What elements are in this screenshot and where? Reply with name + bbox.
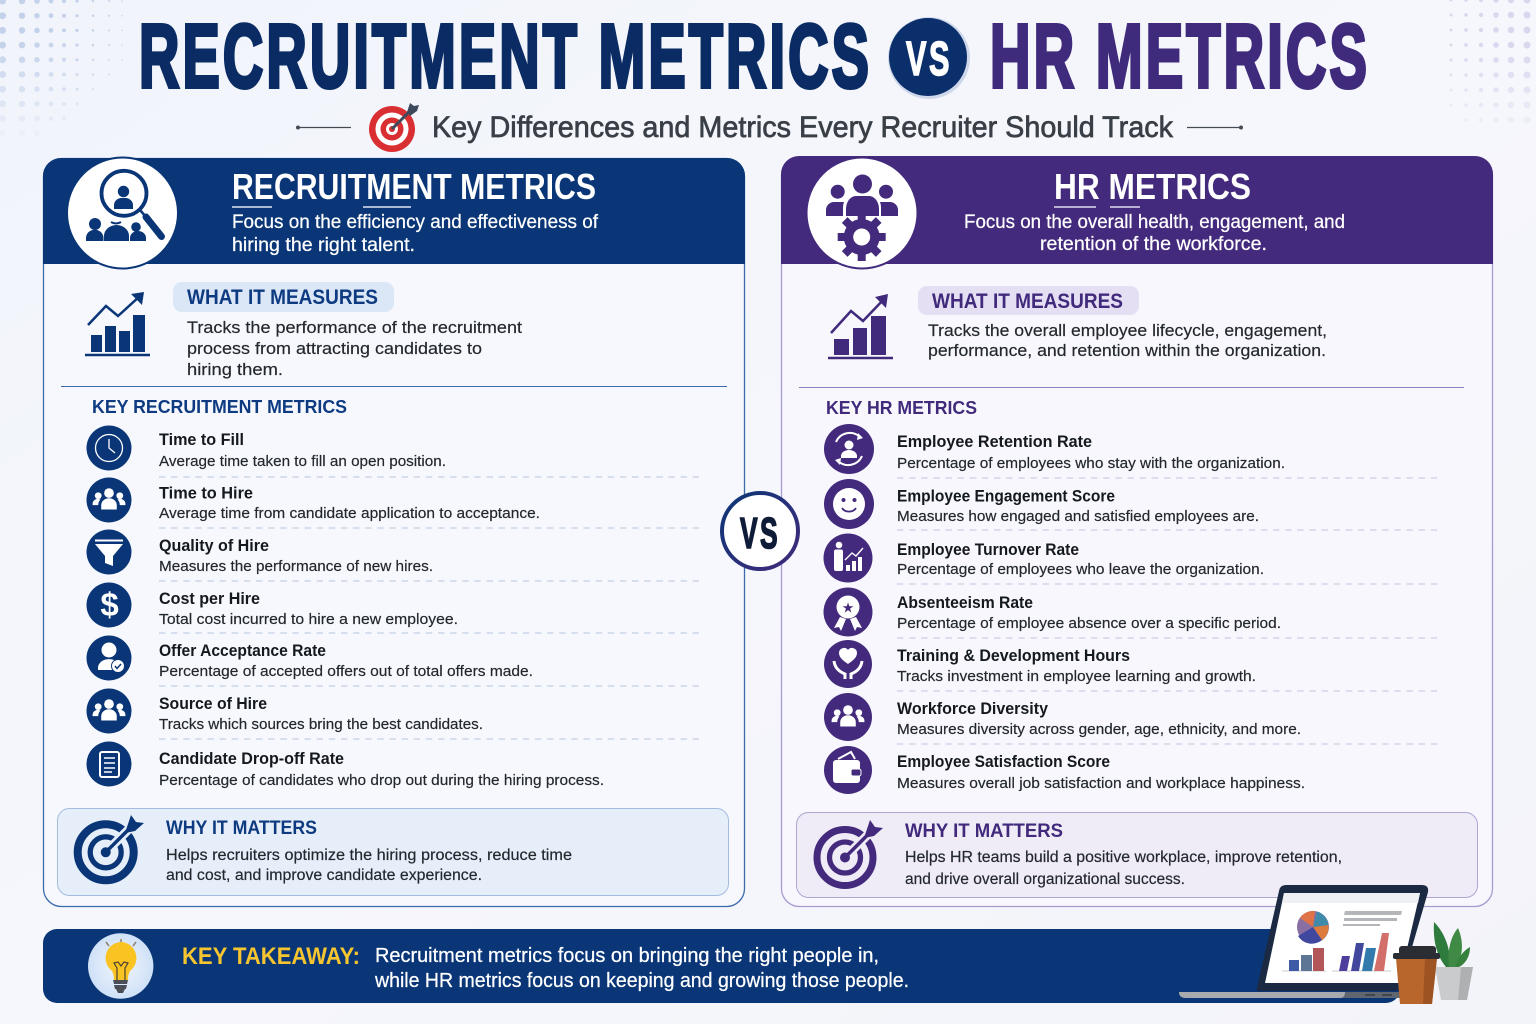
metric: workforce diversity: Measures diversity across gender, age, ethnicity, and more. (897, 721, 1301, 738)
metric: training and development hours: Training & Development Hours (897, 647, 1130, 665)
pie chart (1297, 911, 1329, 944)
metric: cost per hire: Cost per Hire (159, 590, 260, 608)
metrics list (86, 426, 699, 789)
metric: offer acceptance rate: Offer Acceptance Rate (159, 642, 326, 660)
subtitle (296, 103, 1243, 152)
dot pattern top left (2, 1, 122, 136)
metric: workforce diversity (824, 693, 1301, 741)
metric: candidate drop-off rate: Percentage of candidates who drop out during the hiring process. (159, 772, 604, 789)
header description: Focus on the efficiency and effectiveness of (232, 211, 599, 233)
metric: time to hire: Average time from candidate application to acceptance. (159, 505, 540, 522)
laptop (1179, 885, 1428, 998)
what it measures text (187, 318, 522, 379)
metric: source of hire: Tracks which sources bring the best candidates. (159, 716, 483, 733)
callout: why it matters: WHY IT MATTERS (905, 821, 1063, 842)
metric: employee engagement score: Employee Engagement Score (897, 488, 1115, 506)
metric: absenteeism rate: ★ (842, 600, 854, 616)
metric: time to hire (86, 478, 540, 522)
title (139, 7, 1370, 107)
metric: offer acceptance rate: Percentage of accepted offers out of total offers made. (159, 663, 533, 680)
metric: offer acceptance rate (86, 636, 533, 680)
metric: quality of hire: Measures the performance of new hires. (159, 558, 433, 575)
title badge: VS: VS (906, 33, 952, 86)
header description: retention of the workforce. (1040, 233, 1267, 255)
callout: why it matters: Helps HR teams build a positive workplace, improve retention, (905, 849, 1342, 866)
panel: HR metrics (781, 156, 1493, 906)
callout: why it matters: and drive overall organizational success. (905, 871, 1185, 888)
metric: quality of hire: Quality of Hire (159, 537, 269, 555)
header description (964, 211, 1345, 255)
metric: absenteeism rate: Percentage of employee absence over a specific period. (897, 615, 1281, 632)
metric: time to fill: Time to Fill (159, 431, 244, 449)
what it measures text: performance, and retention within the organization. (928, 341, 1326, 360)
metrics list (824, 424, 1437, 794)
metric: cost per hire: Total cost incurred to hire a new employee. (159, 611, 458, 628)
metric: candidate drop-off rate (86, 742, 604, 789)
metric: cost per hire: $ (100, 586, 119, 623)
metric: training and development hours: Tracks investment in employee learning and growth. (897, 668, 1256, 685)
icon: target (78, 815, 144, 880)
metric: absenteeism rate: Absenteeism Rate (897, 594, 1033, 612)
header icon: magnifier over people (67, 158, 178, 268)
metric: training and development hours (824, 640, 1256, 688)
center VS badge: VS (740, 509, 780, 558)
key takeaway text: Recruitment metrics focus on bringing the right people in, (375, 945, 879, 967)
metric: employee turnover rate: Percentage of employees who leave the organization. (897, 561, 1264, 578)
what it measures text (928, 321, 1327, 360)
badge: what it measures: WHAT IT MEASURES (932, 290, 1123, 313)
icon: growth chart (828, 294, 893, 358)
illustration: laptop, cup and plant (1179, 885, 1473, 1004)
metric: workforce diversity: Workforce Diversity (897, 700, 1049, 718)
metric: employee retention rate: Employee Retention Rate (897, 433, 1092, 451)
dot pattern top right (1451, 0, 1527, 135)
metric: employee engagement score: Measures how engaged and satisfied employees are. (897, 508, 1259, 525)
icon: red target (369, 103, 419, 152)
metric: employee retention rate: Percentage of employees who stay with the organization. (897, 455, 1285, 472)
metric: quality of hire (86, 530, 433, 575)
callout: why it matters: and cost, and improve candidate experience. (166, 867, 482, 884)
key takeaway text: while HR metrics focus on keeping and growing those people. (374, 970, 909, 992)
panel: recruitment metrics (43, 158, 745, 906)
metric: absenteeism rate (824, 588, 1281, 636)
metric: employee turnover rate (824, 534, 1264, 582)
header description: Focus on the overall health, engagement, and (964, 211, 1345, 233)
panel header (43, 158, 745, 264)
metric: time to fill (86, 426, 446, 470)
icon: target (817, 820, 883, 886)
metric: employee satisfaction score: Measures overall job satisfaction and workplace happiness. (897, 775, 1305, 792)
badge: what it measures: WHAT IT MEASURES (187, 286, 378, 309)
header description: hiring the right talent. (232, 234, 415, 256)
callout: why it matters: Helps recruiters optimize the hiring process, reduce time (166, 847, 572, 864)
what it measures text: Tracks the overall employee lifecycle, engagement, (928, 321, 1327, 340)
center VS badge (722, 493, 798, 569)
callout: why it matters (58, 808, 728, 896)
what it measures text: Tracks the performance of the recruitment (187, 318, 522, 337)
key takeaway banner (43, 929, 1400, 1003)
metric: candidate drop-off rate: Candidate Drop-off Rate (159, 750, 344, 768)
metric: source of hire: Source of Hire (159, 695, 267, 713)
title: recruitment metrics: RECRUITMENT METRICS (139, 7, 872, 107)
metric: employee satisfaction score: Employee Satisfaction Score (897, 753, 1110, 771)
metric: source of hire (86, 688, 483, 734)
key takeaway text (374, 945, 909, 992)
coffee cup (1393, 946, 1440, 1004)
metric: time to fill: Average time taken to fill an open position. (159, 453, 446, 470)
icon: light bulb (88, 933, 153, 999)
callout: why it matters: WHY IT MATTERS (166, 818, 317, 839)
key metrics heading: KEY RECRUITMENT METRICS (92, 396, 347, 417)
what it measures text: hiring them. (187, 360, 283, 379)
metric: cost per hire (86, 582, 458, 628)
key metrics heading: KEY HR METRICS (826, 397, 977, 418)
what it measures text: process from attracting candidates to (187, 339, 482, 358)
title badge: VS (888, 17, 970, 99)
key takeaway label: KEY TAKEAWAY: (182, 943, 360, 970)
metric: employee engagement score (824, 479, 1259, 529)
panel header (781, 156, 1493, 264)
header icon: team and gear (806, 158, 918, 268)
metric: employee retention rate (824, 424, 1285, 474)
header heading: HR METRICS (1054, 166, 1251, 207)
metric: employee satisfaction score (824, 746, 1305, 794)
metric: time to hire: Time to Hire (159, 484, 253, 502)
callout: why it matters (796, 812, 1478, 898)
header heading: RECRUITMENT METRICS (232, 166, 596, 207)
bar charts (1282, 911, 1402, 971)
icon: growth chart (85, 292, 150, 355)
plant (1434, 922, 1473, 1000)
subtitle text: Key Differences and Metrics Every Recruiter Should Track (432, 111, 1174, 144)
metric: employee turnover rate: Employee Turnover Rate (897, 541, 1079, 559)
header description (232, 211, 599, 256)
